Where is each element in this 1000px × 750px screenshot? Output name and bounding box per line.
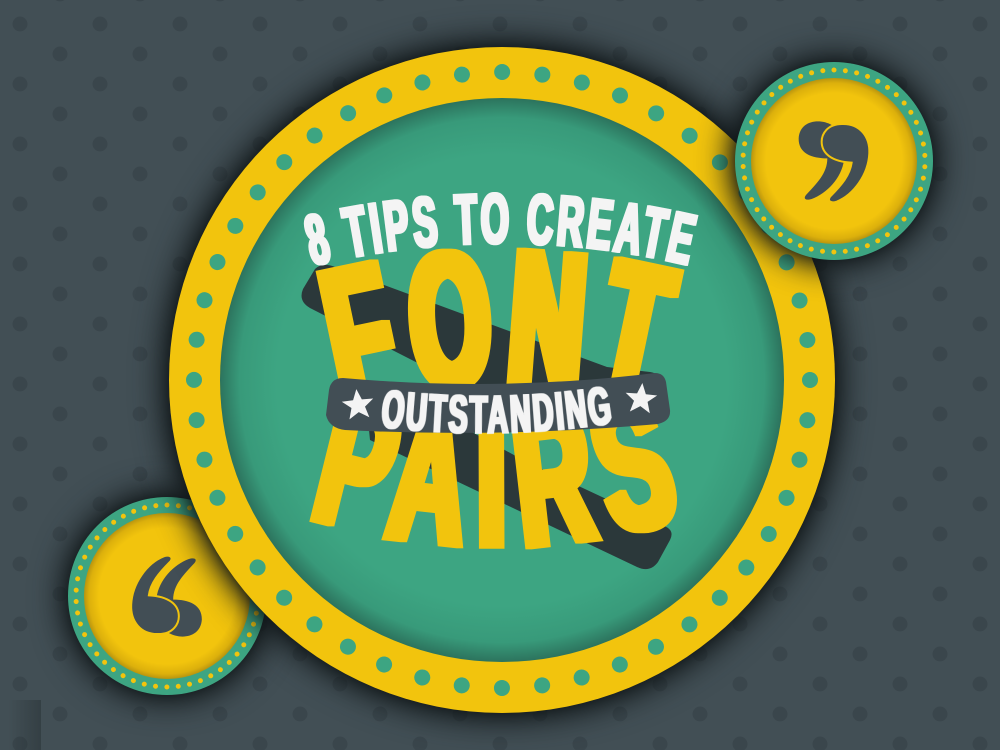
banner: outstanding [326, 373, 670, 434]
badge: closing quote, top right [735, 62, 933, 260]
badge: opening quote, bottom left [68, 497, 266, 695]
banner text: OUTSTANDING [382, 386, 612, 434]
main circle medallion [169, 47, 835, 713]
heading: FONT: FONT [316, 248, 684, 384]
icon: opening quotation mark [131, 556, 202, 637]
heading: 8 tips to create: 8 TIPS TO CREATE [304, 192, 698, 266]
dark ribbon behind PAIRS [368, 420, 672, 569]
icon: left star [341, 387, 375, 420]
icon: closing quotation mark [799, 121, 869, 202]
icon: right star [624, 382, 658, 414]
heading: PAIRS: PAIRS [309, 424, 677, 550]
dark ribbon behind FONT [302, 265, 668, 405]
